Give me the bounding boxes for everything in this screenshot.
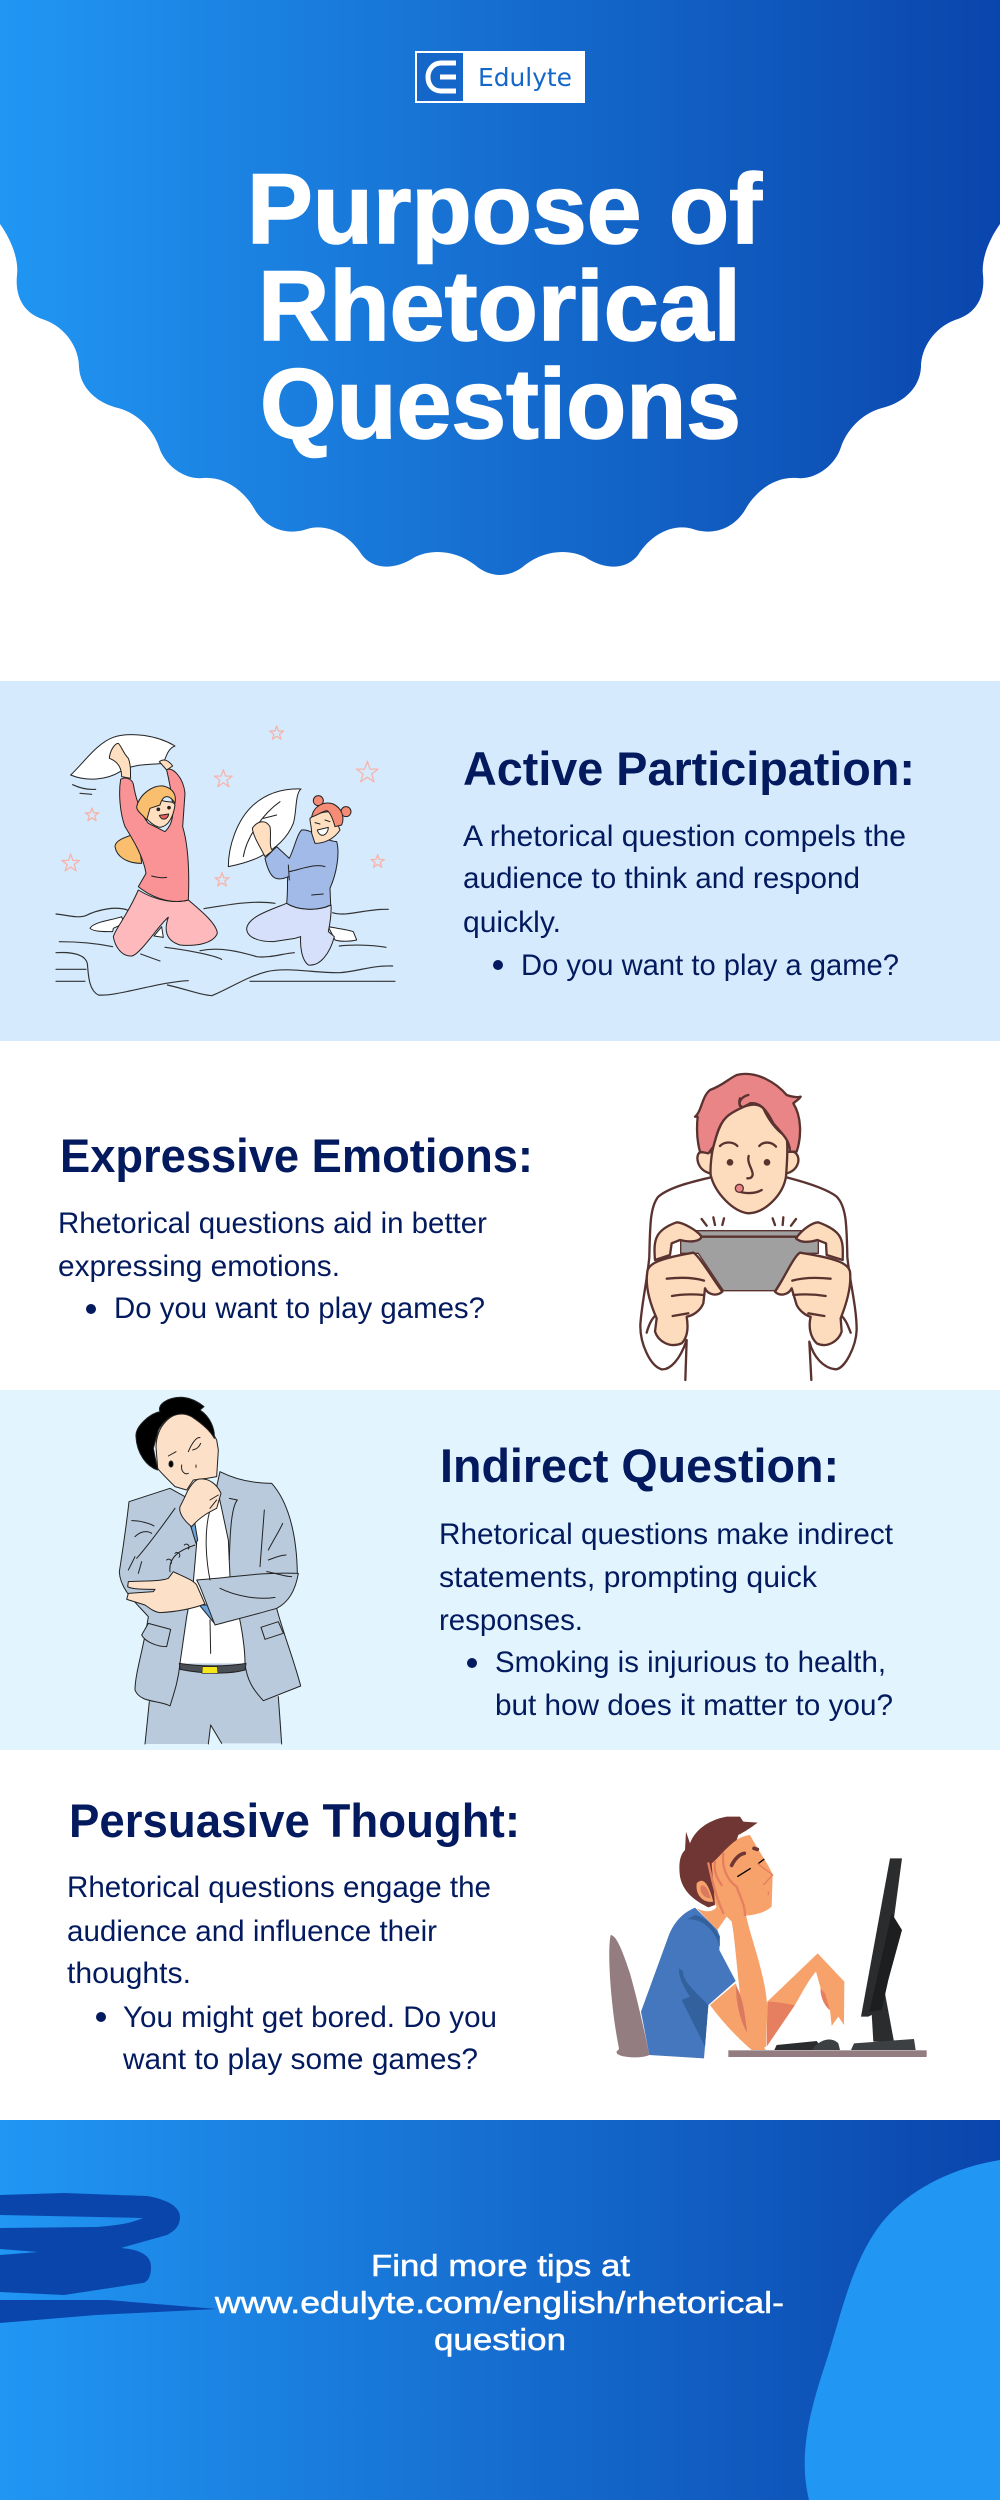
text block: indirect question: Rhetorical questions make indirect: [439, 1518, 893, 1551]
illustration: thinking man: [119, 1397, 301, 1744]
illustration: boy playing on phone: [640, 1074, 857, 1380]
text block: persuasive thought: thoughts.: [67, 1957, 191, 1990]
heading: expressive emotions: Expressive Emotions:: [60, 1129, 533, 1182]
text block: indirect question: [439, 1518, 893, 1722]
decoration: blue blob: [805, 2160, 1000, 2500]
text block: active participation: [463, 820, 906, 982]
heading: active participation: Active Participation:: [463, 742, 915, 795]
logo: Edulyte: [415, 51, 585, 103]
panel: active participation: [0, 681, 1000, 1041]
footer text: question: [434, 2322, 566, 2357]
text block: indirect question: responses.: [439, 1604, 583, 1637]
text block: active participation: A rhetorical question compels the: [463, 820, 906, 853]
title: Rhetorical: [258, 250, 741, 361]
text block: indirect question: statements, prompting quick: [439, 1561, 817, 1594]
text block: expressive emotions: expressing emotions.: [58, 1250, 340, 1283]
text block: persuasive thought: You might get bored. Do you: [123, 2001, 497, 2034]
heading: persuasive thought: Persuasive Thought:: [69, 1794, 520, 1847]
text block: persuasive thought: Rhetorical questions engage the: [67, 1871, 491, 1904]
text block: expressive emotions: Rhetorical questions aid in better: [58, 1207, 487, 1240]
text block: active participation: Do you want to play a game?: [521, 949, 899, 982]
text block: expressive emotions: [58, 1207, 487, 1325]
text block: active participation: audience to think and respond: [463, 862, 860, 895]
title: [247, 153, 763, 459]
panel: persuasive thought: [0, 1750, 1000, 2120]
text block: persuasive thought: audience and influence their: [67, 1915, 437, 1948]
footer panel: [0, 2120, 1000, 2500]
text block: expressive emotions: Do you want to play games?: [114, 1292, 485, 1325]
text block: indirect question: Smoking is injurious to health,: [495, 1646, 886, 1679]
heading: indirect question: Indirect Question:: [440, 1439, 839, 1492]
text block: indirect question: but how does it matter to you?: [495, 1689, 893, 1722]
footer text: www.edulyte.com/english/rhetorical-: [214, 2285, 784, 2320]
logo: Edulyte: Edulyte: [478, 63, 572, 92]
text block: persuasive thought: [67, 1871, 497, 2076]
illustration: pillow fight: [56, 726, 395, 996]
title: Questions: [260, 348, 741, 459]
panel: expressive emotions: [0, 1041, 1000, 1390]
header: wavy blue banner: [0, 0, 1000, 575]
footer text: Find more tips at: [371, 2248, 630, 2283]
illustration: bored man at computer: [609, 1817, 927, 2058]
title: Purpose of: [247, 153, 763, 264]
decoration: brush stroke: [0, 2193, 217, 2323]
text block: active participation: quickly.: [463, 906, 561, 939]
panel: indirect question: [0, 1390, 1000, 1750]
footer text: [214, 2248, 784, 2357]
text block: persuasive thought: want to play some games?: [122, 2043, 478, 2076]
